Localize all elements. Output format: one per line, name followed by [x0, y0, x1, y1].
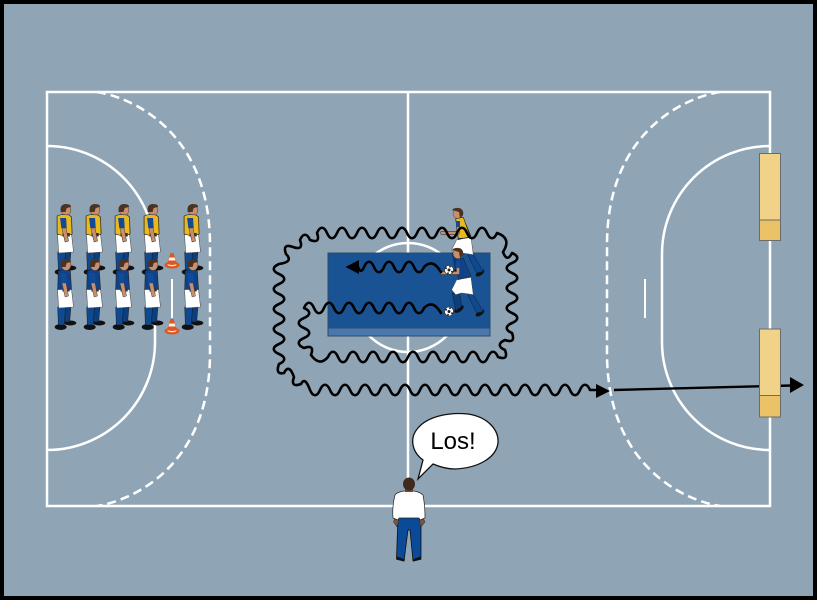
pass path across mat	[358, 262, 441, 272]
waiting players in blue	[55, 259, 203, 330]
arrowhead: end of dribbling path	[596, 384, 610, 398]
arrow: shot on goal	[614, 377, 804, 393]
cone: lower	[164, 319, 180, 334]
dribbling path	[274, 228, 598, 395]
cone: upper	[164, 253, 180, 268]
handball court lines	[47, 92, 770, 506]
running player in blue carrying ball	[442, 248, 486, 318]
arrowhead: pass path	[346, 260, 359, 274]
blue mat	[328, 253, 490, 336]
waiting players in yellow bibs	[55, 204, 203, 275]
goal: top	[760, 154, 780, 240]
ball on ground	[444, 307, 454, 316]
speech bubble	[413, 414, 498, 479]
coach	[393, 478, 425, 562]
running player in yellow bib	[442, 208, 486, 278]
speech text: Los!	[430, 428, 476, 455]
goal: bottom	[760, 329, 780, 417]
